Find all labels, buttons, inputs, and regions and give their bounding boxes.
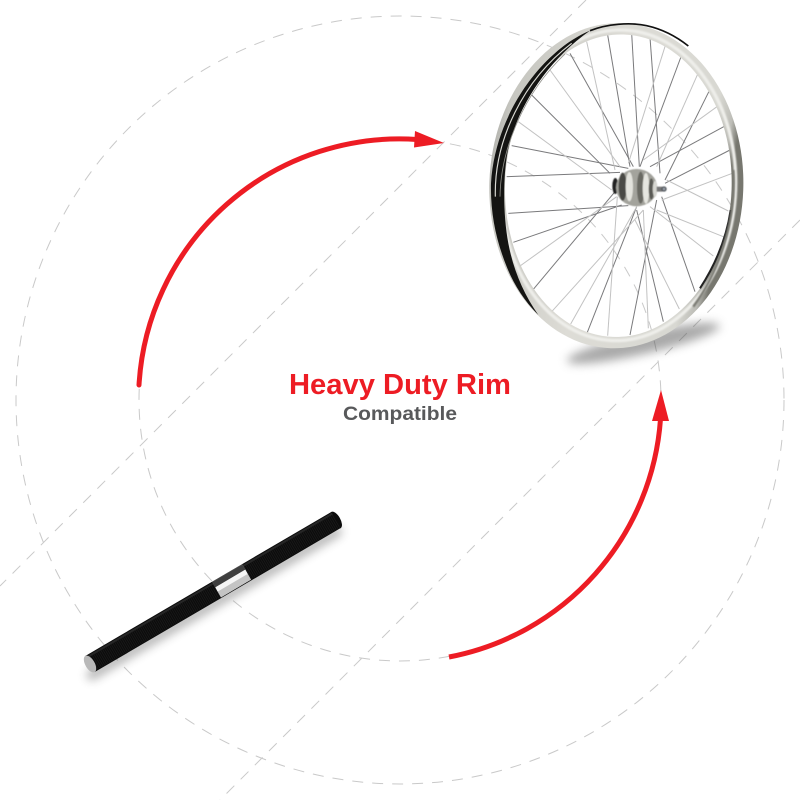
axle end cap [81,654,99,674]
threaded shaft [86,510,344,664]
dark left crescent [491,31,590,315]
axle [81,510,344,675]
dark top edge [590,24,688,46]
arrow: axle to wheel [139,131,444,385]
subheading: Compatible: Compatible [343,404,457,425]
bright centre band [496,26,741,345]
light grooves on crescent [495,43,572,197]
spokes [507,33,732,336]
wheel [484,19,749,371]
hub [612,169,667,206]
rim body [484,19,749,353]
rim [484,19,749,353]
arrow: wheel back to axle [449,390,669,657]
outer right edge shade [693,170,734,307]
heading: Heavy Duty Rim: Heavy Duty Rim [289,369,511,401]
axle shadow [92,532,337,675]
wheel shadow [565,315,722,371]
smooth silver centre [212,564,251,597]
dark inner lower right [700,210,731,288]
